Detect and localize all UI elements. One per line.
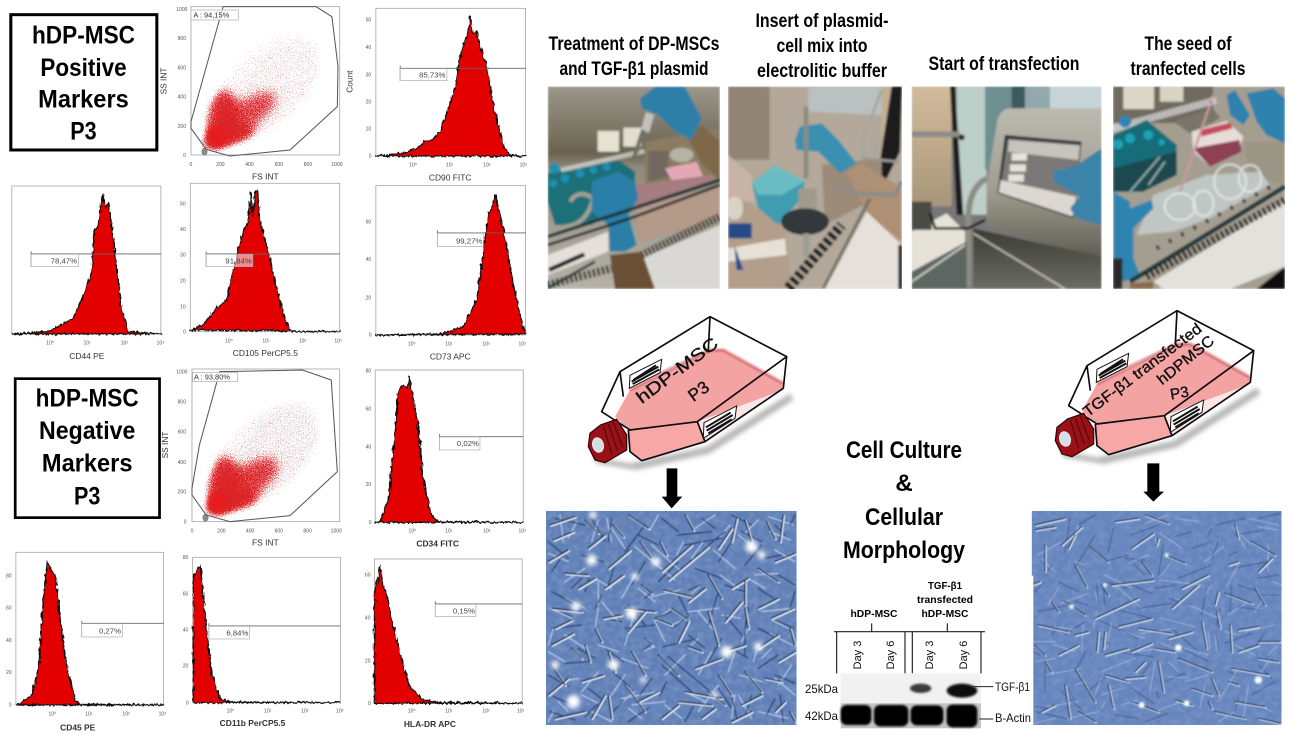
histogram: CD73 APC 99.27%: 10⁰ xyxy=(408,342,416,348)
histogram: CD73 APC 99.27% xyxy=(366,186,526,362)
flask: TGF-β1 transfected hDPMSC P3: hDPMSC xyxy=(1154,332,1218,389)
histogram: CD73 APC 99.27%: 10² xyxy=(482,342,490,348)
micrograph: TGF-β1 transfected spindle-shaped cell culture xyxy=(1032,511,1282,725)
caption: Treatment of DP-MSCs and TGF-β1 plasmid: Treatment of DP-MSCs xyxy=(548,34,720,55)
band labels xyxy=(995,680,1031,725)
histogram: CD105 PerCP5.5 91.84%: 30 xyxy=(180,253,186,259)
heading: hDP-MSC Negative Markers P3: Markers xyxy=(42,450,132,478)
band labels: B-Actin xyxy=(995,711,1031,725)
flask: hDP-MSC P3 xyxy=(588,317,793,470)
micrograph: hDP-MSC spindle-shaped cell culture xyxy=(546,511,797,725)
heading: Cell Culture & Cellular Morphology: & xyxy=(895,470,913,497)
histogram: CD105 PerCP5.5 91.84%: 20 xyxy=(180,279,186,285)
scatter plot: FS INT vs SS INT, gate A 94.15%: 200 xyxy=(178,124,186,130)
histogram: CD11b PerCP5.5 6.84%: 10² xyxy=(301,708,309,714)
histogram: CD45 PE 0.27%: CD45 PE xyxy=(60,722,96,732)
molecular weight labels xyxy=(805,682,838,723)
histogram: CD73 APC 99.27%: 10¹ xyxy=(445,342,453,348)
histogram: HLA-DR APC 0.15%: 10³ xyxy=(517,709,525,715)
scatter plot: FS INT vs SS INT, gate A 93.80%: 600 xyxy=(275,528,283,534)
histogram: CD11b PerCP5.5 6.84%: 0 xyxy=(186,700,189,706)
heading: hDP-MSC Negative Markers P3: P3 xyxy=(74,482,100,510)
histogram: CD44 PE 78.47%: 10⁰ xyxy=(46,340,54,346)
heading: hDP-MSC Negative Markers P3: Negative xyxy=(39,417,135,445)
scatter plot: FS INT vs SS INT, gate A 94.15%: 0 xyxy=(190,162,193,168)
flask: TGF-β1 transfected hDPMSC P3 xyxy=(1055,311,1260,464)
heading: hDP-MSC Positive Markers P3: hDP-MSC xyxy=(32,21,135,49)
histogram: CD44 PE 78.47%: CD44 PE xyxy=(69,351,105,361)
photo: seeding transfected cells into plates xyxy=(1113,86,1285,289)
histogram: CD11b PerCP5.5 6.84%: 6,84% xyxy=(226,629,249,638)
caption: The seed of tranfected cells: The seed of xyxy=(1144,34,1232,55)
histogram: CD11b PerCP5.5 6.84%: 10³ xyxy=(336,708,344,714)
histogram: CD34 FITC 0.02%: 0 xyxy=(369,520,372,526)
histogram: CD73 APC 99.27%: 60 xyxy=(366,219,371,225)
scatter plot: FS INT vs SS INT, gate A 93.80%: 400 xyxy=(246,528,255,534)
blot group labels: transfected xyxy=(917,594,973,606)
arrow: from transfected flask to culture image xyxy=(1143,463,1164,502)
histogram: CD11b PerCP5.5 6.84%: 60 xyxy=(183,591,189,597)
scatter plot: FS INT vs SS INT, gate A 94.15%: 400 xyxy=(245,162,254,168)
histogram: HLA-DR APC 0.15%: 0,15% xyxy=(453,607,475,616)
histogram: CD105 PerCP5.5 91.84%: 10¹ xyxy=(262,338,270,344)
flask: hDP-MSC P3: hDP-MSC xyxy=(632,333,722,407)
lane labels: Day 6 xyxy=(958,641,970,669)
histogram: CD90 FITC 85.73%: 10¹ xyxy=(446,163,454,169)
caption: Insert of plasmid-cell mix into electrolitic buffer: electrolitic buffer xyxy=(757,61,887,82)
histogram: CD90 FITC 85.73%: 40 xyxy=(366,45,371,51)
histogram: CD105 PerCP5.5 91.84%: 50 xyxy=(180,202,186,208)
scatter plot: FS INT vs SS INT, gate A 93.80%: 200 xyxy=(217,528,226,534)
histogram: CD34 FITC 0.02%: 10³ xyxy=(519,528,526,534)
heading: hDP-MSC Positive Markers P3: P3 xyxy=(70,117,97,145)
histogram: CD34 FITC 0.02%: 10⁰ xyxy=(409,528,416,534)
scatter plot: FS INT vs SS INT, gate A 94.15%: 200 xyxy=(216,162,225,168)
histogram: CD105 PerCP5.5 91.84%: CD105 PerCP5.5 xyxy=(233,348,298,358)
histogram: HLA-DR APC 0.15%: HLA-DR APC xyxy=(404,719,456,729)
histogram: HLA-DR APC 0.15%: 20 xyxy=(365,658,371,664)
heading: Cell Culture & Cellular Morphology: Cellular xyxy=(865,504,943,531)
heading: Cell Culture & Cellular Morphology: Morphology xyxy=(843,537,966,564)
histogram: CD11b PerCP5.5 6.84%: 20 xyxy=(183,664,189,670)
histogram: CD105 PerCP5.5 91.84%: 40 xyxy=(180,227,186,233)
histogram: CD11b PerCP5.5 6.84%: 40 xyxy=(183,628,189,634)
heading: hDP-MSC Negative Markers P3: hDP-MSC xyxy=(36,384,139,412)
histogram: CD34 FITC 0.02%: CD34 FITC xyxy=(416,539,459,549)
caption: Treatment of DP-MSCs and TGF-β1 plasmid xyxy=(548,34,720,80)
caption: Start of transfection: Start of transfection xyxy=(928,54,1080,75)
histogram: CD44 PE 78.47%: 78,47% xyxy=(51,256,77,265)
flask: hDP-MSC P3: P3 xyxy=(684,377,713,405)
photo: pipetting cells and plasmid in hood xyxy=(548,86,720,289)
scatter plot: FS INT vs SS INT, gate A 93.80%: 0 xyxy=(191,528,194,534)
histogram: CD90 FITC 85.73%: 85,73% xyxy=(419,71,446,80)
histogram: CD90 FITC 85.73%: 10⁰ xyxy=(409,163,417,169)
histogram: CD45 PE 0.27% xyxy=(6,552,166,732)
blot brackets xyxy=(834,623,985,673)
histogram: CD105 PerCP5.5 91.84% xyxy=(180,183,342,358)
band labels: TGF-β1 xyxy=(995,680,1030,694)
histogram: CD45 PE 0.27%: 20 xyxy=(6,670,12,676)
histogram: HLA-DR APC 0.15%: 10¹ xyxy=(445,709,453,715)
histogram: CD44 PE 78.47%: 10³ xyxy=(157,340,164,346)
caption: Insert of plasmid-cell mix into electrolitic buffer xyxy=(756,11,888,82)
scatter plot: FS INT vs SS INT, gate A 93.80%: 1000 xyxy=(331,528,342,534)
histogram: HLA-DR APC 0.15%: 40 xyxy=(365,615,371,621)
scatter plot: FS INT vs SS INT, gate A 93.80%: 200 xyxy=(178,489,186,495)
blot group labels xyxy=(850,580,973,620)
histogram: CD73 APC 99.27%: 0 xyxy=(369,333,372,339)
flask: TGF-β1 transfected hDPMSC P3: TGF-β1 transfected xyxy=(1080,320,1205,421)
scatter plot: FS INT vs SS INT, gate A 93.80%: 600 xyxy=(178,429,186,435)
histogram: CD45 PE 0.27%: 10⁰ xyxy=(49,712,56,718)
heading: hDP-MSC Positive Markers P3: Markers xyxy=(38,85,129,113)
histogram: CD105 PerCP5.5 91.84%: 10³ xyxy=(334,338,342,344)
histogram: CD90 FITC 85.73%: 10³ xyxy=(520,163,527,169)
histogram: CD34 FITC 0.02%: 10¹ xyxy=(445,528,453,534)
histogram: CD45 PE 0.27%: 60 xyxy=(6,605,12,611)
histogram: CD73 APC 99.27%: 99,27% xyxy=(456,236,482,245)
caption: Insert of plasmid-cell mix into electrolitic buffer: cell mix into xyxy=(776,36,868,57)
lane labels: Day 3 xyxy=(852,641,864,669)
histogram: CD11b PerCP5.5 6.84%: 10⁰ xyxy=(227,708,234,714)
histogram: CD44 PE 78.47%: 10¹ xyxy=(84,340,91,346)
histogram: CD44 PE 78.47%: 10² xyxy=(121,340,128,346)
flask: TGF-β1 transfected hDPMSC P3: P3 xyxy=(1169,384,1190,404)
histogram: CD90 FITC 85.73%: CD90 FITC xyxy=(429,173,472,183)
histogram: CD44 PE 78.47% xyxy=(12,186,164,361)
caption: The seed of tranfected cells: tranfected cells xyxy=(1130,59,1246,80)
molecular weight labels: 42kDa xyxy=(805,709,838,723)
histogram: CD73 APC 99.27%: CD73 APC xyxy=(430,352,471,362)
scatter plot: FS INT vs SS INT, gate A 94.15%: 0 xyxy=(183,153,186,159)
panel: transfection procedure headings and photos xyxy=(548,11,1285,289)
photo: starting transfection on device touchscreen xyxy=(912,86,1102,289)
histogram: CD105 PerCP5.5 91.84%: 10⁰ xyxy=(225,338,233,344)
histogram: CD105 PerCP5.5 91.84%: 10 xyxy=(180,304,186,310)
blot image bands xyxy=(841,673,993,728)
histogram: CD11b PerCP5.5 6.84%: CD11b PerCP5.5 xyxy=(220,718,286,728)
scatter plot: FS INT vs SS INT, gate A 93.80% xyxy=(160,369,348,547)
histogram: CD45 PE 0.27%: 0 xyxy=(9,703,12,709)
histogram: CD105 PerCP5.5 91.84%: 91,84% xyxy=(225,256,252,265)
arrow: from untransfected flask to culture image xyxy=(662,468,682,508)
blot group labels: hDP-MSC xyxy=(850,608,898,620)
histogram: HLA-DR APC 0.15% xyxy=(365,559,525,729)
scatter plot: FS INT vs SS INT, gate A 93.80%: SS INT xyxy=(160,432,170,458)
heading: hDP-MSC Positive Markers P3: Positive xyxy=(40,54,127,82)
scatter plot: FS INT vs SS INT, gate A 94.15%: 1000 xyxy=(331,162,343,168)
histogram: CD11b PerCP5.5 6.84%: 10¹ xyxy=(264,708,272,714)
histogram: CD90 FITC 85.73%: 20 xyxy=(366,99,371,105)
scatter plot: FS INT vs SS INT, gate A 94.15%: 600 xyxy=(178,65,186,71)
scatter plot: FS INT vs SS INT, gate A 94.15% xyxy=(159,4,350,181)
histogram: HLA-DR APC 0.15%: 10⁰ xyxy=(408,709,416,715)
histogram: HLA-DR APC 0.15%: 10² xyxy=(482,709,490,715)
histogram: CD45 PE 0.27%: 40 xyxy=(6,638,12,644)
histogram: CD105 PerCP5.5 91.84%: 0 xyxy=(183,329,186,335)
scatter plot: FS INT vs SS INT, gate A 93.80%: 1000 xyxy=(176,369,188,375)
histogram: CD34 FITC 0.02% xyxy=(366,369,526,549)
histogram: CD34 FITC 0.02%: 0,02% xyxy=(457,439,479,448)
histogram: CD45 PE 0.27%: 10² xyxy=(122,712,130,718)
histogram: CD34 FITC 0.02%: 80 xyxy=(366,369,371,375)
caption: The seed of tranfected cells xyxy=(1130,34,1246,80)
histogram: CD34 FITC 0.02%: 20 xyxy=(366,482,371,488)
scatter plot: FS INT vs SS INT, gate A 93.80%: A : 93,80% xyxy=(194,373,230,382)
scatter plot: FS INT vs SS INT, gate A 94.15%: 400 xyxy=(178,95,186,101)
western blot: TGF-β1 and B-Actin xyxy=(805,580,1031,728)
lane labels xyxy=(852,641,970,669)
histogram: CD73 APC 99.27%: 40 xyxy=(366,257,371,263)
histogram: CD90 FITC 85.73%: 10² xyxy=(483,163,491,169)
scatter plot: FS INT vs SS INT, gate A 93.80%: 400 xyxy=(178,460,186,466)
scatter plot: FS INT vs SS INT, gate A 93.80%: 800 xyxy=(178,399,186,405)
scatter plot: FS INT vs SS INT, gate A 93.80%: 800 xyxy=(303,528,312,534)
histogram: CD90 FITC 85.73%: 0 xyxy=(369,154,372,160)
scatter plot: FS INT vs SS INT, gate A 93.80%: FS INT xyxy=(252,537,279,547)
caption: Treatment of DP-MSCs and TGF-β1 plasmid: and TGF-β1 plasmid xyxy=(560,59,708,80)
molecular weight labels: 25kDa xyxy=(805,682,838,696)
heading: Cell Culture & Cellular Morphology: Cell Culture xyxy=(846,437,962,464)
scatter plot: FS INT vs SS INT, gate A 94.15%: 600 xyxy=(275,162,283,168)
histogram: CD73 APC 99.27%: 10³ xyxy=(519,342,526,348)
heading: hDP-MSC Positive Markers P3 xyxy=(11,15,157,150)
scatter plot: FS INT vs SS INT, gate A 93.80%: 0 xyxy=(184,519,187,525)
histogram: HLA-DR APC 0.15%: 0 xyxy=(368,701,371,707)
heading: hDP-MSC Negative Markers P3 xyxy=(15,379,160,518)
histogram: CD90 FITC 85.73%: Count xyxy=(344,70,355,93)
histogram: CD45 PE 0.27%: 0,27% xyxy=(99,626,121,635)
caption: Insert of plasmid-cell mix into electrolitic buffer: Insert of plasmid- xyxy=(756,11,888,32)
heading: Cell Culture & Cellular Morphology xyxy=(843,437,966,564)
histogram: CD105 PerCP5.5 91.84%: 10² xyxy=(299,338,306,344)
histogram: CD11b PerCP5.5 6.84%: 80 xyxy=(183,555,189,561)
photo: inserting plasmid-cell mix into buffer xyxy=(727,86,902,289)
histogram: CD34 FITC 0.02%: 40 xyxy=(366,444,371,450)
histogram: CD34 FITC 0.02%: 60 xyxy=(366,407,371,413)
scatter plot: FS INT vs SS INT, gate A 94.15%: FS INT xyxy=(252,171,279,181)
histogram: CD45 PE 0.27%: 80 xyxy=(6,573,12,579)
histogram: CD90 FITC 85.73%: 50 xyxy=(366,18,371,24)
scatter plot: FS INT vs SS INT, gate A 94.15%: 1000 xyxy=(176,7,188,13)
histogram: CD90 FITC 85.73% xyxy=(344,8,527,183)
lane labels: Day 6 xyxy=(885,641,897,669)
scatter plot: FS INT vs SS INT, gate A 94.15%: 800 xyxy=(178,36,186,42)
histogram: CD73 APC 99.27%: 20 xyxy=(366,295,371,301)
panel: negative markers flow cytometry xyxy=(6,369,526,732)
blot group labels: TGF-β1 xyxy=(928,580,962,592)
histogram: CD45 PE 0.27%: 10³ xyxy=(159,712,166,718)
panel: positive markers flow cytometry xyxy=(11,4,527,362)
histogram: CD45 PE 0.27%: 10¹ xyxy=(85,712,93,718)
blot group labels: hDP-MSC xyxy=(922,608,969,620)
histogram: CD11b PerCP5.5 6.84% xyxy=(183,555,344,728)
histogram: CD90 FITC 85.73%: 30 xyxy=(366,72,371,78)
scatter plot: FS INT vs SS INT, gate A 94.15%: 800 xyxy=(304,162,312,168)
scatter plot: FS INT vs SS INT, gate A 94.15%: SS INT xyxy=(159,68,169,94)
histogram: HLA-DR APC 0.15%: 60 xyxy=(365,573,371,579)
histogram: CD34 FITC 0.02%: 10² xyxy=(483,528,491,534)
histogram: CD90 FITC 85.73%: 10 xyxy=(366,127,371,133)
scatter plot: FS INT vs SS INT, gate A 94.15%: A : 94,15% xyxy=(193,10,230,19)
lane labels: Day 3 xyxy=(924,641,936,669)
